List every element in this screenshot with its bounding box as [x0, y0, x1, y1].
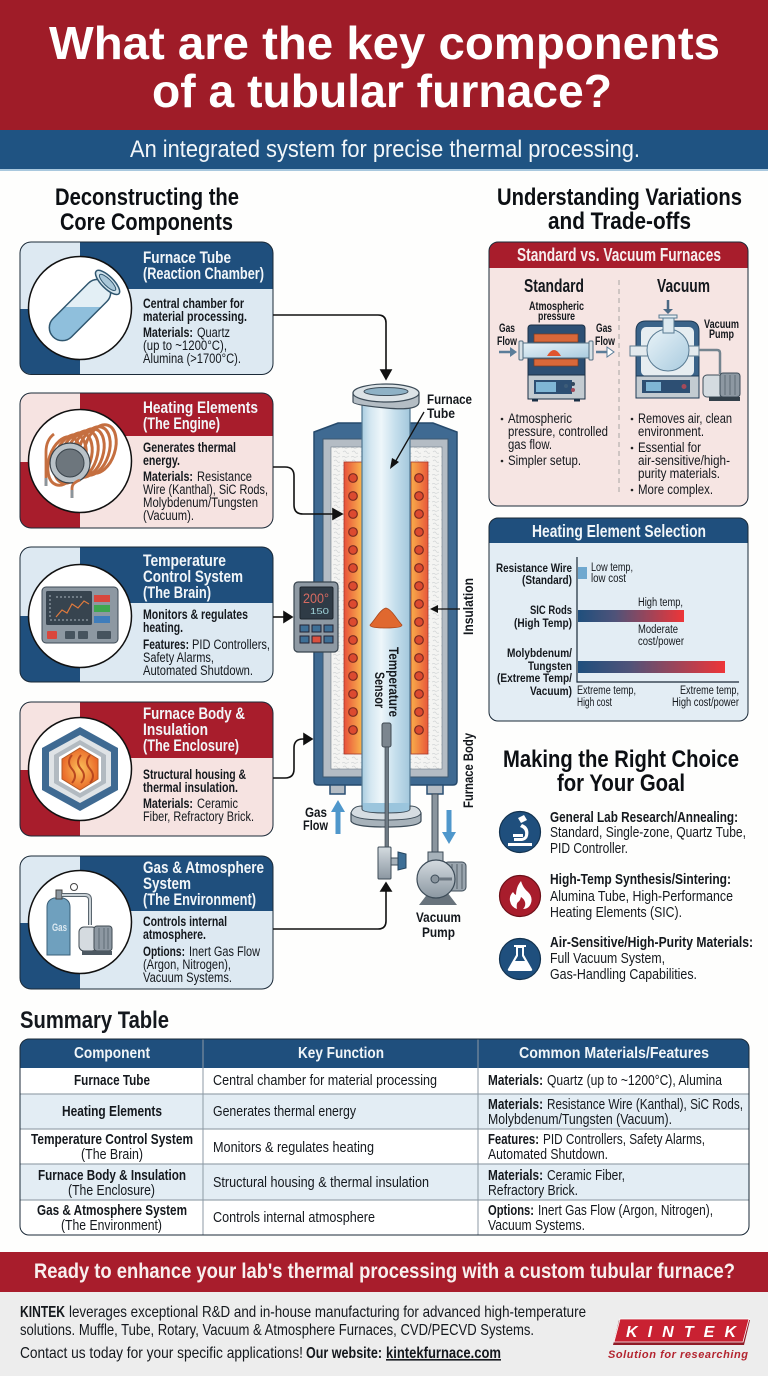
icon: standard furnace: [519, 325, 593, 402]
card title: (Reaction Chamber): [143, 265, 264, 283]
table header row: Component: [74, 1045, 151, 1062]
bar: SiC rods: SIC Rods: [530, 605, 572, 617]
row: furnace body: Ceramic Fiber,: [547, 1167, 625, 1184]
icon: microscope: [500, 812, 540, 852]
icon: gas cylinder and pump: Gas: [52, 922, 67, 934]
card title: Gas & Atmosphere: [143, 859, 264, 877]
goal: general lab research: PID Controller.: [550, 840, 628, 857]
card body: Safety Alarms,: [143, 650, 214, 665]
panel: temperature control card: [20, 547, 273, 682]
row: gas and atmosphere: Options:: [488, 1202, 534, 1219]
bar: SiC rods: Moderate: [638, 624, 678, 636]
row: temperature control: [31, 1131, 705, 1163]
heating element right: [411, 462, 428, 754]
diagram: furnace cross-section: [294, 384, 466, 905]
row: furnace tube: Materials:: [488, 1072, 543, 1089]
bar chart axes: [577, 557, 739, 682]
bullets: vacuum: air-sensitive/high-: [638, 453, 730, 468]
row: heating elements: Materials:: [488, 1096, 543, 1113]
icon: copper coil: [28, 410, 132, 512]
goal: high temp synthesis: Alumina Tube, High-Performance: [550, 888, 733, 905]
row: furnace body: (The Enclosure): [68, 1182, 155, 1199]
bar: SiC rods: (High Temp): [514, 618, 572, 630]
table: summary: [20, 1039, 749, 1235]
card body: Ceramic: [197, 796, 238, 811]
footer text: solutions. Muffle, Tube, Rotary, Vacuum & Atmosphere Furnaces, CVD/PECVD Systems.: [20, 1322, 534, 1339]
card body: [143, 440, 268, 523]
card body: atmosphere.: [143, 927, 206, 942]
row: gas and atmosphere: Inert Gas Flow (Argon, Nitrogen),: [538, 1202, 713, 1219]
column heading: vacuum: Vacuum: [657, 276, 710, 296]
furnace body shell: [314, 423, 457, 785]
title banner: What are the key components: [49, 17, 720, 69]
row: furnace body: Structural housing & thermal insulation: [213, 1174, 429, 1191]
label: gas flow: Gas: [305, 804, 327, 820]
row: furnace tube: Quartz (up to ~1200°C), Alumina: [547, 1072, 723, 1089]
label: furnace body: Furnace Body: [460, 733, 476, 808]
subtitle band: An integrated system for precise thermal processing.: [130, 136, 640, 163]
bar: molybdenum tungsten: Molybdenum/: [507, 648, 573, 660]
card body: energy.: [143, 453, 180, 468]
card body: [143, 914, 260, 985]
card body: Features:: [143, 637, 189, 652]
bar: resistance wire: [496, 562, 633, 587]
arrow: vacuum flow down: [442, 810, 456, 844]
card title: [143, 705, 245, 755]
row: gas and atmosphere: Vacuum Systems.: [488, 1217, 585, 1234]
card body: Alumina (>1700°C).: [143, 351, 241, 366]
card body: (Vacuum).: [143, 508, 194, 523]
row: gas and atmosphere: [37, 1202, 713, 1234]
footer text: Our website:: [306, 1345, 382, 1362]
label: temperature sensor: Temperature: [386, 647, 402, 717]
card body: Automated Shutdown.: [143, 663, 253, 678]
row: furnace body: Refractory Brick.: [488, 1182, 578, 1199]
card body: Monitors & regulates: [143, 607, 248, 622]
bullets: vacuum: environment.: [638, 424, 704, 439]
label: temperature sensor: Sensor: [372, 672, 388, 708]
icon: insulated hexagon: [28, 718, 132, 820]
temperature controller: 200°: [303, 590, 329, 606]
footer text: kintekfurnace.com: [386, 1345, 501, 1362]
labels: atmospheric pressure: Atmospheric: [529, 301, 584, 313]
arrow: gas card to valve: [273, 883, 391, 929]
bar: resistance wire: low cost: [591, 573, 627, 585]
arrow: heating card to element: [273, 467, 342, 519]
label: vacuum pump: [704, 319, 739, 341]
card body: Materials:: [143, 325, 193, 340]
row: temperature control: (The Brain): [81, 1146, 143, 1163]
label: vacuum pump: Vacuum: [416, 909, 461, 925]
row: heating elements: Heating Elements: [62, 1103, 162, 1120]
card body: (up to ~1200°C),: [143, 338, 227, 353]
bar: molybdenum tungsten: Tungsten: [528, 661, 572, 673]
card body: Resistance: [197, 469, 252, 484]
row: temperature control: Temperature Control System: [31, 1131, 193, 1148]
card body: Options:: [143, 944, 185, 959]
arrow: furnace tube card to tube: [273, 315, 391, 379]
bar: molybdenum tungsten: High cost/power: [672, 697, 739, 709]
bullets: standard: Simpler setup.: [508, 453, 581, 468]
card title: [143, 859, 264, 909]
card body: Quartz: [197, 325, 230, 340]
heading: variations: and Trade-offs: [548, 208, 691, 235]
call to action banner: [0, 1252, 768, 1292]
label: gas flow: [303, 800, 345, 834]
icon: flask: [500, 938, 540, 980]
card body: Structural housing &: [143, 767, 246, 782]
card body: [143, 607, 270, 678]
bullets: standard: pressure, controlled: [508, 424, 608, 439]
heading: core components: Core Components: [60, 209, 233, 236]
row: heating elements: Generates thermal energy: [213, 1103, 356, 1120]
label: vacuum pump: Pump: [709, 329, 734, 341]
panel: furnace body card: [20, 702, 273, 836]
goal: air-sensitive materials: [500, 934, 753, 983]
logo: KINTEK: Solution for researching: [608, 1349, 748, 1361]
bullets: vacuum: More complex.: [638, 482, 713, 497]
card title: (The Brain): [143, 584, 211, 602]
row: furnace tube: [74, 1072, 723, 1089]
row: furnace tube: Central chamber for material processing: [213, 1072, 437, 1089]
title banner: of a tubular furnace?: [152, 65, 612, 117]
row: gas and atmosphere: (The Environment): [61, 1217, 162, 1234]
insulation layer: [331, 447, 442, 769]
label: furnace tube: Tube: [427, 405, 455, 421]
row: gas and atmosphere: Gas & Atmosphere System: [37, 1202, 187, 1219]
logo: KINTEK: [608, 1319, 750, 1361]
logo: KINTEK: KINTEK: [626, 1324, 737, 1341]
card body: Inert Gas Flow: [189, 944, 260, 959]
gas and vacuum ports: [330, 785, 443, 794]
icon: gas cylinder and pump: [28, 870, 132, 974]
card body: Vacuum Systems.: [143, 970, 232, 985]
card body: PID Controllers,: [192, 637, 270, 652]
goal: high temp synthesis: Heating Elements (SIC).: [550, 904, 682, 921]
labels: atmospheric pressure: [529, 301, 584, 323]
label: insulation: Insulation: [460, 578, 476, 635]
footer background: [0, 1292, 768, 1376]
bullets: standard: [501, 411, 608, 468]
labels: gas flow right: Gas: [596, 323, 612, 335]
card title: System: [143, 875, 191, 893]
label: furnace tube: [390, 391, 472, 469]
footer text: [20, 1304, 586, 1362]
label: vacuum pump: Vacuum: [704, 319, 739, 331]
row: furnace body: Materials:: [488, 1167, 543, 1184]
labels: gas flow left: Gas: [499, 323, 515, 335]
vacuum line: [432, 794, 438, 852]
row: temperature control: Automated Shutdown.: [488, 1146, 608, 1163]
panel: heating elements card: [20, 393, 273, 528]
card body: thermal insulation.: [143, 780, 238, 795]
card title: Insulation: [143, 721, 208, 739]
bar: resistance wire: (Standard): [522, 575, 572, 587]
card title: [143, 249, 264, 283]
label: insulation: [430, 578, 476, 635]
card body: Controls internal: [143, 914, 227, 929]
bar: molybdenum tungsten: Vacuum): [530, 686, 572, 698]
column heading: standard: Standard: [524, 276, 584, 296]
bullets: vacuum: [631, 411, 732, 497]
footer text: KINTEK: [20, 1304, 65, 1321]
card body: Generates thermal: [143, 440, 236, 455]
arrow: control card to controller: [273, 612, 292, 622]
label: gas flow: Flow: [303, 817, 328, 833]
heater coil dots: [349, 474, 423, 734]
icon: control panel: [28, 564, 132, 668]
sample powder: [370, 608, 402, 628]
card body: (Argon, Nitrogen),: [143, 957, 231, 972]
row: temperature control: Features:: [488, 1131, 539, 1148]
labels: atmospheric pressure: pressure: [538, 311, 575, 323]
labels: gas flow right: [595, 323, 615, 357]
temperature controller: 150: [310, 607, 330, 616]
subtitle band: [0, 130, 768, 171]
card title: Heating Elements: [143, 399, 258, 417]
row: heating elements: [62, 1096, 743, 1128]
heading: right choice: [503, 746, 739, 797]
row: heating elements: Molybdenum/Tungsten (Vacuum).: [488, 1111, 672, 1128]
bar: molybdenum tungsten: (Extreme Temp/: [497, 673, 573, 685]
card title: (The Environment): [143, 891, 256, 909]
bar: molybdenum tungsten: [497, 648, 739, 709]
bar: resistance wire: Resistance Wire: [496, 563, 572, 575]
table header row: Common Materials/Features: [519, 1045, 709, 1062]
row: gas and atmosphere: Controls internal atmosphere: [213, 1209, 375, 1226]
table header row: [74, 1045, 709, 1062]
goal: air-sensitive materials: Full Vacuum System,: [550, 950, 665, 967]
bar: molybdenum tungsten: Extreme temp,: [680, 685, 739, 697]
card title: (The Engine): [143, 415, 220, 433]
bar: SiC rods: cost/power: [638, 636, 684, 648]
panel title: Heating Element Selection: [532, 521, 706, 541]
card title: Temperature: [143, 552, 226, 570]
card title: (The Enclosure): [143, 737, 239, 755]
panel: furnace tube card: [20, 242, 273, 374]
heading: variations: [497, 184, 742, 235]
labels: gas flow left: Flow: [497, 336, 517, 348]
icon: flame: [500, 876, 540, 916]
bar: molybdenum tungsten: Extreme temp,: [577, 685, 636, 697]
goal: air-sensitive materials: Gas-Handling Capabilities.: [550, 966, 697, 983]
title banner: [0, 0, 768, 130]
panel: standard vs vacuum: [489, 242, 748, 506]
bar: molybdenum tungsten: High cost: [577, 697, 613, 709]
labels: gas flow left: [497, 323, 517, 357]
bullets: standard: gas flow.: [508, 437, 552, 452]
label: temperature sensor: [372, 647, 402, 717]
gas valve: [378, 847, 406, 879]
card body: [143, 296, 247, 366]
bar: SiC rods: [514, 597, 684, 648]
heading: core components: [55, 184, 239, 236]
top flange: [353, 384, 419, 409]
labels: gas flow right: Flow: [595, 336, 615, 348]
row: furnace body: [38, 1167, 625, 1199]
table rows background: [20, 1039, 749, 1235]
heading: core components: Deconstructing the: [55, 184, 239, 211]
heating element left: [344, 462, 362, 754]
bar: SiC rods: High temp,: [638, 597, 683, 609]
card body: heating.: [143, 620, 183, 635]
card body: Materials:: [143, 469, 193, 484]
card body: material processing.: [143, 309, 247, 324]
arrow: body card to furnace shell: [273, 734, 312, 778]
card body: Molybdenum/Tungsten: [143, 495, 258, 510]
bullets: vacuum: purity materials.: [638, 466, 720, 481]
bullets: standard: Atmospheric: [508, 411, 572, 426]
card title: Furnace Body &: [143, 705, 245, 723]
temperature controller: [294, 582, 338, 652]
card body: Fiber, Refractory Brick.: [143, 809, 254, 824]
quartz furnace tube: [362, 400, 410, 815]
goal: general lab research: [500, 809, 746, 857]
bullets: vacuum: Removes air, clean: [638, 411, 732, 426]
panel: gas and atmosphere card: [20, 856, 273, 989]
card body: [143, 767, 254, 824]
vacuum pump: [417, 852, 466, 905]
card body: Central chamber for: [143, 296, 245, 311]
heading: right choice: for Your Goal: [557, 770, 685, 797]
icon: vacuum furnace: [630, 300, 740, 401]
row: furnace body: Furnace Body & Insulation: [38, 1167, 186, 1184]
card title: [143, 552, 243, 602]
bullets: vacuum: Essential for: [638, 440, 701, 455]
goal: high temp synthesis: [500, 871, 733, 921]
label: vacuum pump: [416, 909, 461, 940]
table header row: Key Function: [298, 1045, 384, 1062]
footer text: Contact us today for your specific applications!: [20, 1345, 303, 1362]
bottom flange: [351, 806, 421, 827]
row: temperature control: PID Controllers, Safety Alarms,: [543, 1131, 705, 1148]
bar: resistance wire: Low temp,: [591, 562, 633, 574]
label: furnace tube: Furnace: [427, 391, 472, 407]
label: vacuum pump: Pump: [422, 924, 455, 940]
card title: [143, 399, 258, 433]
heading: summary table: Summary Table: [20, 1007, 169, 1034]
icon: glass test tube: [28, 256, 132, 360]
card body: Materials:: [143, 796, 193, 811]
card title: Control System: [143, 568, 243, 586]
row: furnace tube: Furnace Tube: [74, 1072, 150, 1089]
temperature sensor probe: [382, 723, 391, 847]
card title: Furnace Tube: [143, 249, 231, 267]
row: temperature control: Monitors & regulates heating: [213, 1139, 374, 1156]
card body: Wire (Kanthal), SiC Rods,: [143, 482, 268, 497]
footer text: leverages exceptional R&D and in-house manufacturing for advanced high-temperature: [69, 1304, 586, 1321]
panel: heating element selection chart: [489, 518, 748, 721]
